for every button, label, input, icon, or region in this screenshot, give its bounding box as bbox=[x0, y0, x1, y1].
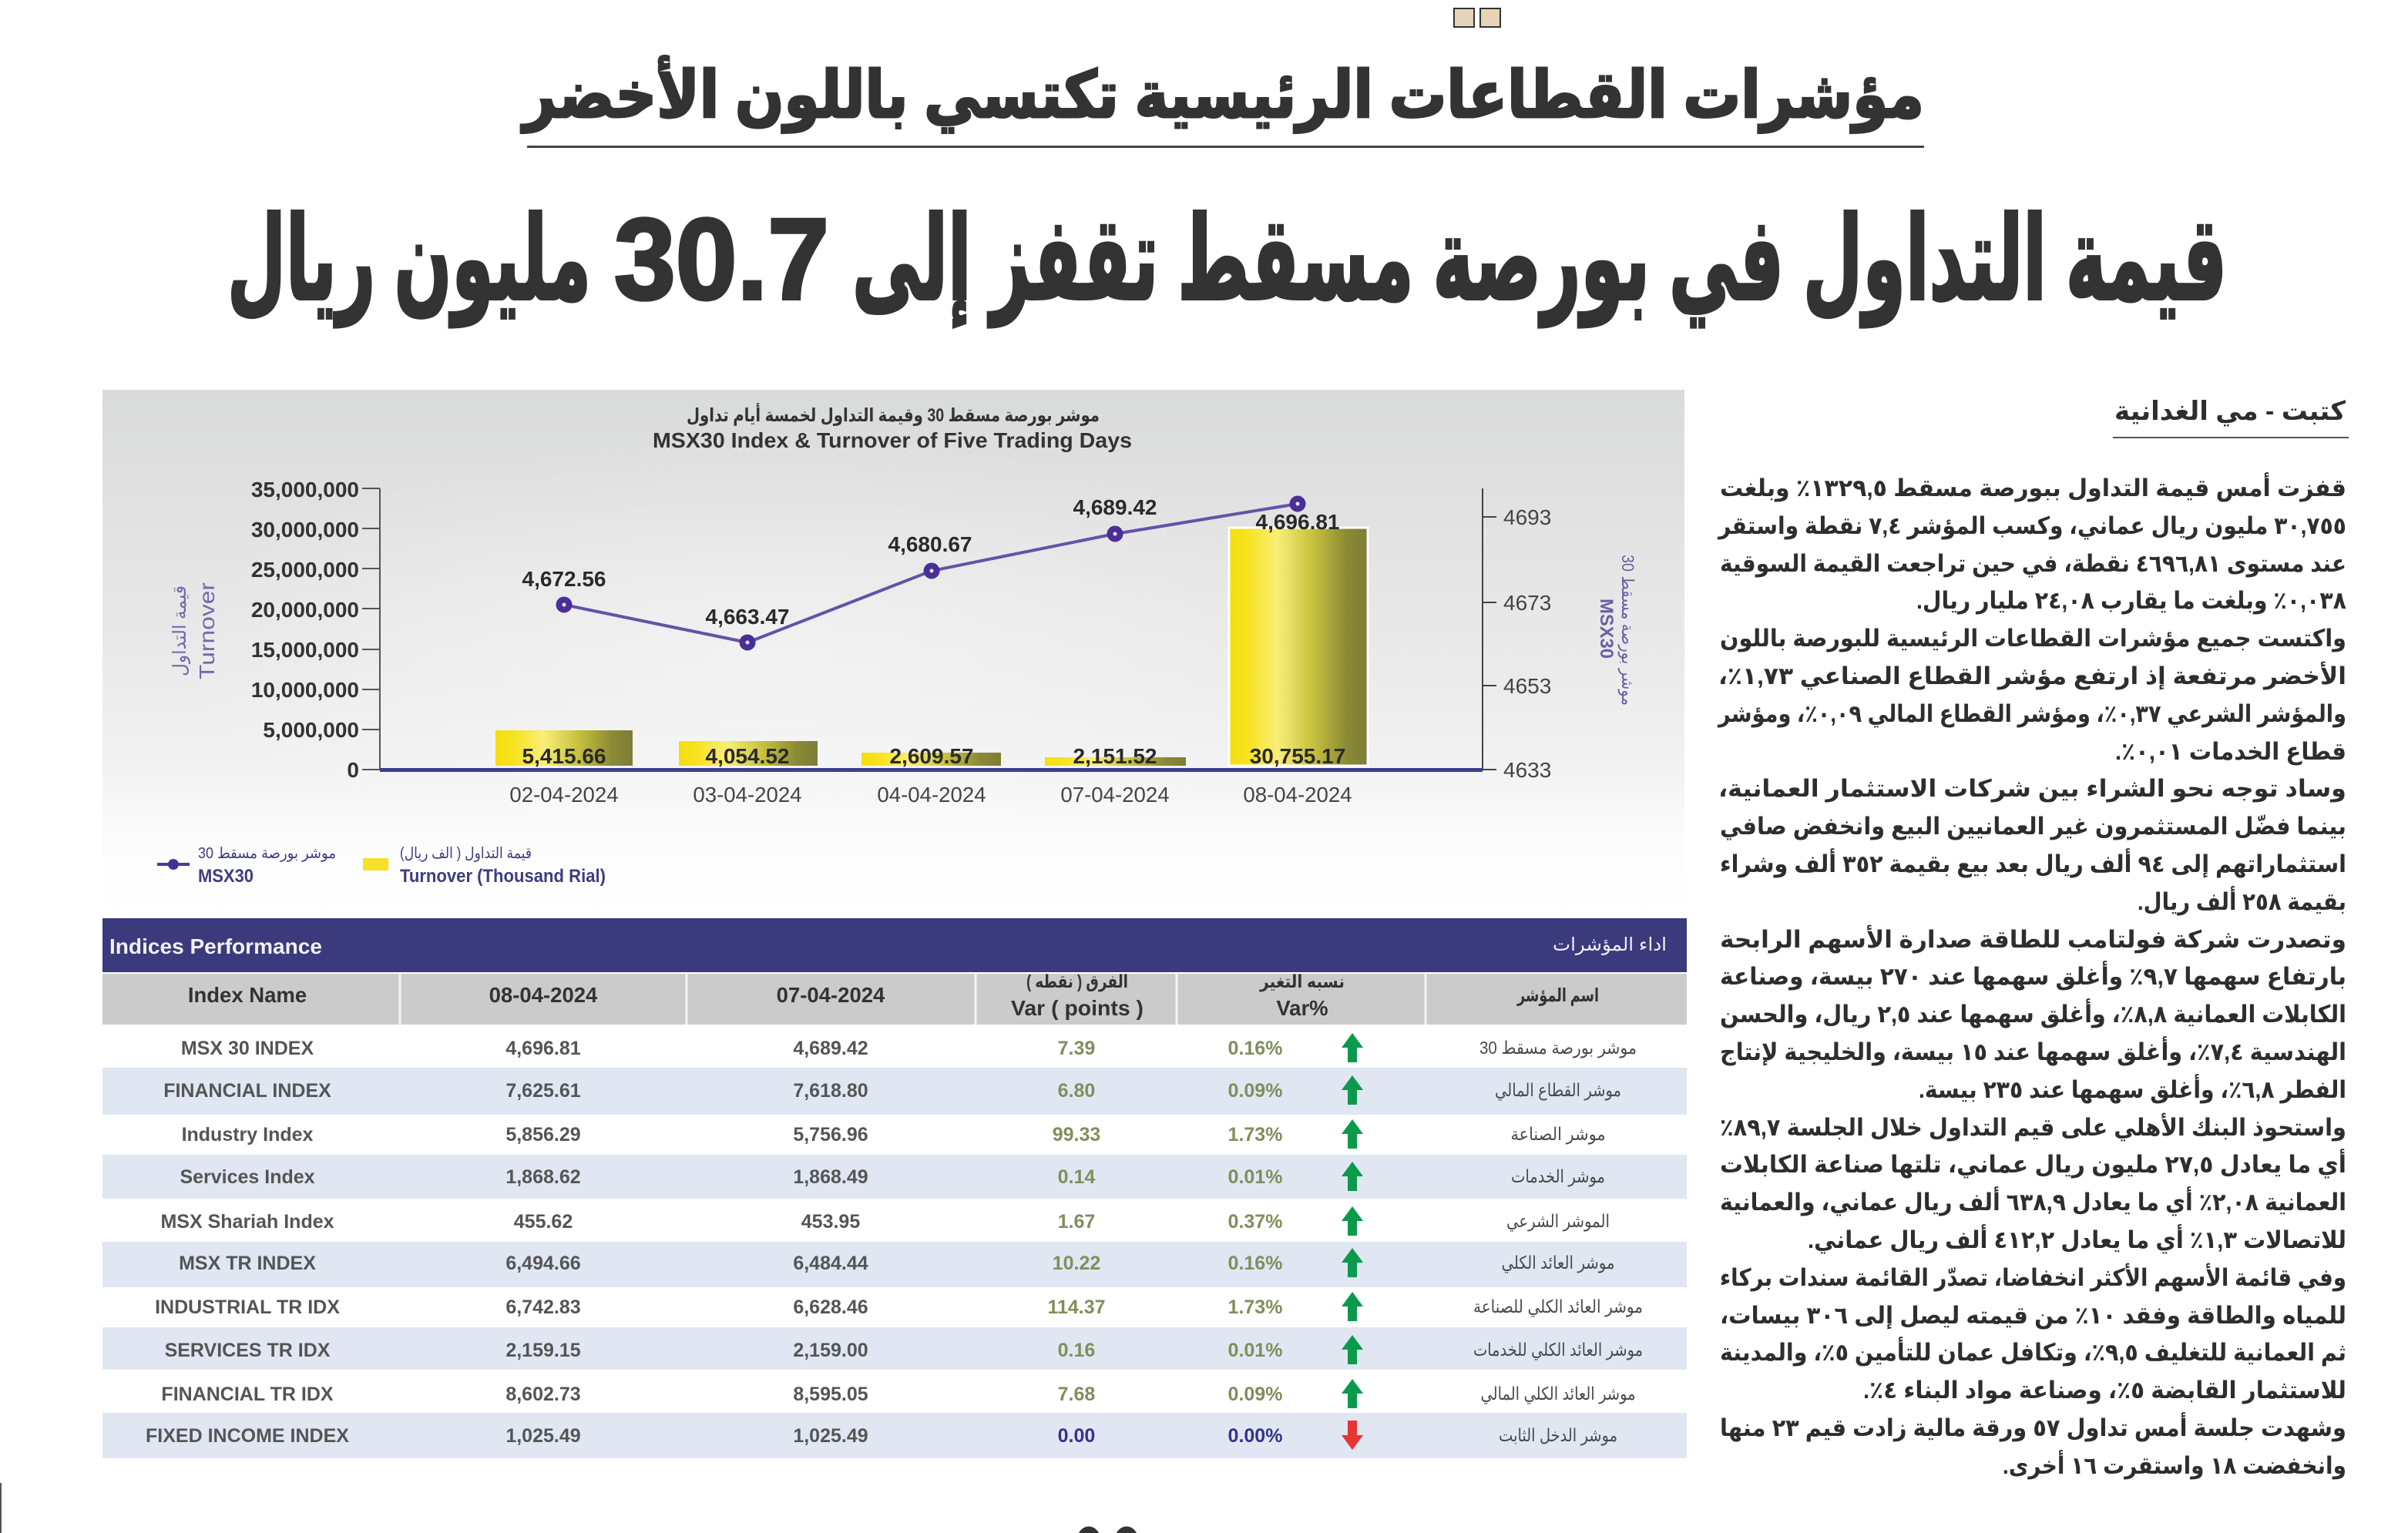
bar value labels: 30,755.17 bbox=[1250, 744, 1345, 768]
row: MSX TR INDEX: 6,494.66 bbox=[505, 1253, 581, 1274]
table column headers: 07-04-2024 bbox=[777, 983, 885, 1007]
left axis: 20,000,000 bbox=[251, 598, 359, 622]
right axis bbox=[1483, 488, 1551, 782]
panel: indices performance table bbox=[102, 918, 1687, 1458]
article body text: ٠,٠٣٨٪ وبلغت ما يقارب ٢٤,٠٨ مليار ريال. bbox=[1916, 587, 2346, 615]
row: FIXED INCOME INDEX bbox=[146, 1421, 1617, 1450]
left axis title: قيمة التداول bbox=[170, 585, 190, 676]
left axis: 0 bbox=[347, 758, 359, 782]
row: INDUSTRIAL TR IDX: INDUSTRIAL TR IDX bbox=[155, 1297, 340, 1318]
right axis title bbox=[1596, 555, 1637, 706]
article body text: استثماراتهم إلى ٩٤ ألف ريال بعد بيع بقيمة ٣٥٢ ألف وشراء bbox=[1720, 848, 2346, 878]
left axis: 30,000,000 bbox=[251, 518, 359, 542]
row: MSX TR INDEX: 10.22 bbox=[1053, 1253, 1100, 1274]
bar value labels: 2,151.52 bbox=[1073, 744, 1157, 768]
article body text: الفطر ٦,٨٪، وأغلق سهمها عند ٢٣٥ بيسة. bbox=[1919, 1074, 2346, 1104]
row: Services Index bbox=[180, 1162, 1605, 1191]
table column headers bbox=[102, 971, 1687, 1025]
right axis title: MSX30 bbox=[1596, 599, 1617, 659]
row: Services Index: Services Index bbox=[180, 1166, 315, 1188]
title bbox=[227, 194, 2227, 327]
table column headers: Var ( points ) bbox=[1011, 996, 1144, 1020]
right axis: 4693 bbox=[1503, 505, 1551, 529]
article body text: الكابلات العمانية ٨,٨٪، وأغلق سهمها عند ٢,٥ ريال، والحسن bbox=[1720, 998, 2346, 1028]
row: FINANCIAL TR IDX: موشر العائد الكلي المالي bbox=[1481, 1384, 1635, 1404]
row: FINANCIAL INDEX: 6.80 bbox=[1058, 1080, 1095, 1102]
article body text: وفي قائمة الأسهم الأكثر انخفاضا، تصدّر القائمة سندات بركاء bbox=[1720, 1263, 2346, 1292]
line value labels: 4,680.67 bbox=[888, 532, 972, 556]
row: SERVICES TR IDX: 2,159.00 bbox=[793, 1340, 868, 1361]
article body text: والمؤشر الشرعي ٠,٣٧٪، ومؤشر القطاع المالي ٠,٠٩٪، ومؤشر bbox=[1717, 700, 2346, 728]
chart title: موشر بورصة مسقط 30 وقيمة التداول لخمسة أيام تداول bbox=[687, 403, 1100, 426]
row: INDUSTRIAL TR IDX bbox=[155, 1292, 1643, 1321]
article body text: أي ما يعادل ٢٧,٥ مليون ريال عماني، تلتها صناعة الكابلات bbox=[1720, 1149, 2346, 1179]
row: Industry Index: موشر الصناعة bbox=[1510, 1124, 1606, 1145]
title: مليون ريال bbox=[227, 194, 591, 327]
row: FIXED INCOME INDEX: 0.00% bbox=[1228, 1425, 1282, 1447]
row: Services Index: 0.01% bbox=[1228, 1166, 1282, 1188]
left axis: 10,000,000 bbox=[251, 678, 359, 702]
left axis bbox=[251, 478, 380, 782]
chart title: MSX30 Index & Turnover of Five Trading Days bbox=[653, 428, 1132, 452]
date labels bbox=[509, 783, 1352, 807]
row: SERVICES TR IDX: 2,159.15 bbox=[505, 1340, 581, 1361]
row: Industry Index: 5,756.96 bbox=[793, 1124, 868, 1146]
article body text: الأخضر مرتفعة إذ ارتفع مؤشر القطاع الصناعي ١,٧٣٪، bbox=[1718, 661, 2346, 690]
row: MSX TR INDEX: 0.16% bbox=[1228, 1253, 1282, 1274]
date labels: 08-04-2024 bbox=[1243, 783, 1352, 807]
legend: MSX30 bbox=[198, 866, 254, 887]
heading: kicker: مؤشرات القطاعات الرئيسية تكتسي باللون الأخضر bbox=[520, 55, 1924, 133]
row: MSX 30 INDEX: 4,689.42 bbox=[793, 1038, 868, 1059]
row: INDUSTRIAL TR IDX: 114.37 bbox=[1047, 1297, 1106, 1318]
table column headers: Var% bbox=[1276, 996, 1328, 1020]
row: MSX Shariah Index: 453.95 bbox=[801, 1211, 860, 1233]
bar value labels: 4,054.52 bbox=[706, 744, 789, 768]
row: FIXED INCOME INDEX: موشر الدخل الثابت bbox=[1499, 1425, 1617, 1446]
table title bar: اداء المؤشرات bbox=[1553, 934, 1667, 955]
icon: section ornament squares bbox=[1454, 8, 1500, 27]
row: MSX Shariah Index bbox=[160, 1206, 1610, 1236]
row: FINANCIAL TR IDX bbox=[161, 1379, 1635, 1408]
row: MSX 30 INDEX: 4,696.81 bbox=[505, 1038, 581, 1059]
right axis: 4653 bbox=[1503, 674, 1551, 698]
row: MSX 30 INDEX: MSX 30 INDEX bbox=[181, 1038, 314, 1059]
bar chart: turnover bbox=[495, 528, 1368, 766]
byline: كتبت - مي الغدانية bbox=[2114, 397, 2346, 427]
table row bands bbox=[102, 1068, 1687, 1458]
table column headers: 08-04-2024 bbox=[489, 983, 598, 1007]
row: MSX Shariah Index: 0.37% bbox=[1228, 1211, 1282, 1233]
row: Services Index: 1,868.62 bbox=[505, 1166, 581, 1188]
row: MSX TR INDEX bbox=[179, 1248, 1615, 1277]
article body text: وساد توجه نحو الشراء بين شركات الاستثمار العمانية، bbox=[1718, 775, 2346, 803]
article body text: عند مستوى ٤٦٩٦,٨١ نقطة، في حين تراجعت القيمة السوقية bbox=[1720, 550, 2346, 578]
zero baseline bbox=[380, 768, 1483, 772]
row: FINANCIAL INDEX: 0.09% bbox=[1228, 1080, 1282, 1102]
row: FINANCIAL TR IDX: FINANCIAL TR IDX bbox=[161, 1384, 334, 1405]
chart title bbox=[653, 403, 1132, 452]
table column headers: اسم المؤشر bbox=[1516, 985, 1599, 1006]
panel: chart bbox=[102, 390, 1684, 917]
row: FIXED INCOME INDEX: FIXED INCOME INDEX bbox=[146, 1425, 349, 1447]
row: FINANCIAL TR IDX: 8,595.05 bbox=[793, 1384, 868, 1405]
row: FINANCIAL INDEX: FINANCIAL INDEX bbox=[163, 1080, 331, 1102]
article body text: بينما فضّل المستثمرون غير العمانيين البيع وانخفض صافي bbox=[1720, 813, 2346, 840]
table title bar: Indices Performance bbox=[109, 934, 322, 958]
row: FINANCIAL TR IDX: 7.68 bbox=[1058, 1384, 1095, 1405]
row: MSX TR INDEX: 6,484.44 bbox=[793, 1253, 868, 1274]
row: SERVICES TR IDX: SERVICES TR IDX bbox=[165, 1340, 331, 1361]
row: Services Index: 0.14 bbox=[1058, 1166, 1095, 1188]
article body text: بقيمة ٢٥٨ ألف ريال. bbox=[2138, 886, 2346, 916]
line value labels bbox=[522, 495, 1339, 629]
article body text: للاتصالات ١,٣٪ أي ما يعادل ٤١٢,٢ ألف ريال عماني. bbox=[1808, 1224, 2346, 1254]
article body text: للاستثمار القابضة ٥٪، وصناعة مواد البناء ٤٪. bbox=[1863, 1377, 2346, 1404]
left axis: 25,000,000 bbox=[251, 558, 359, 582]
article body text: وانخفضت ١٨ واستقرت ١٦ أخرى. bbox=[2003, 1450, 2346, 1480]
line chart: MSX30 bbox=[559, 499, 1302, 647]
page edge line bbox=[0, 1483, 2, 1533]
row: Industry Index bbox=[182, 1119, 1606, 1149]
line value labels: 4,663.47 bbox=[706, 605, 789, 629]
article body text: بارتفاع سهمها ٩,٧٪ وأغلق سهمها عند ٢٧٠ بيسة، وصناعة bbox=[1720, 961, 2346, 991]
left axis: 35,000,000 bbox=[251, 478, 359, 501]
right axis: 4633 bbox=[1503, 758, 1551, 782]
date labels: 07-04-2024 bbox=[1060, 783, 1170, 807]
article body text: وتصدرت شركة فولتامب للطاقة صدارة الأسهم الرابحة bbox=[1720, 924, 2346, 954]
line value labels: 4,689.42 bbox=[1073, 495, 1157, 519]
article body text bbox=[1717, 472, 2346, 1480]
article body text: الهندسية ٧,٤٪، وأغلق سهمها عند ١٥ بيسة، والخليجية لإنتاج bbox=[1720, 1036, 2346, 1066]
row: INDUSTRIAL TR IDX: 6,742.83 bbox=[505, 1297, 581, 1318]
legend bbox=[157, 845, 606, 887]
left axis title bbox=[170, 582, 219, 679]
row: FINANCIAL TR IDX: 0.09% bbox=[1228, 1384, 1282, 1405]
row: FIXED INCOME INDEX: 1,025.49 bbox=[793, 1425, 868, 1447]
row: FINANCIAL INDEX: موشر القطاع المالي bbox=[1495, 1080, 1621, 1101]
left axis: 15,000,000 bbox=[251, 638, 359, 662]
article body text: وشهدت جلسة أمس تداول ٥٧ ورقة مالية زادت قيم ٢٣ منها bbox=[1720, 1412, 2346, 1442]
line value labels: 4,672.56 bbox=[522, 567, 606, 591]
right axis: 4673 bbox=[1503, 591, 1551, 615]
row: SERVICES TR IDX: 0.16 bbox=[1058, 1340, 1095, 1361]
article body text: واكتست جميع مؤشرات القطاعات الرئيسية للبورصة باللون bbox=[1720, 625, 2346, 652]
article body text: العمانية ٢,٠٨٪ أي ما يعادل ٦٣٨,٩ ألف ريال عماني، والعمانية bbox=[1720, 1186, 2346, 1216]
article body text: واستحوذ البنك الأهلي على قيم التداول خلال الجلسة ٨٩,٧٪ bbox=[1720, 1112, 2346, 1142]
row: Services Index: 1,868.49 bbox=[793, 1166, 868, 1188]
table column headers: نسبه التغير bbox=[1259, 971, 1345, 992]
left axis title: Turnover bbox=[195, 582, 219, 679]
clipped next headline digits at page bottom bbox=[1080, 1531, 1136, 1533]
row: SERVICES TR IDX: 0.01% bbox=[1228, 1340, 1282, 1361]
bar value labels: 5,415.66 bbox=[522, 744, 606, 768]
bar value labels bbox=[522, 744, 1345, 768]
table column headers: Index Name bbox=[188, 983, 307, 1007]
row: MSX 30 INDEX: موشر بورصة مسقط 30 bbox=[1479, 1038, 1637, 1058]
row: INDUSTRIAL TR IDX: 1.73% bbox=[1228, 1297, 1282, 1318]
legend: قيمة التداول ( الف ريال) bbox=[400, 845, 532, 862]
bar value labels: 2,609.57 bbox=[889, 744, 974, 768]
row: SERVICES TR IDX: موشر العائد الكلي للخدمات bbox=[1473, 1340, 1643, 1360]
row: MSX TR INDEX: MSX TR INDEX bbox=[179, 1253, 316, 1274]
row: Industry Index: 1.73% bbox=[1228, 1124, 1282, 1146]
row: MSX Shariah Index: الموشر الشرعي bbox=[1506, 1211, 1610, 1232]
row: INDUSTRIAL TR IDX: 6,628.46 bbox=[793, 1297, 868, 1318]
row: FIXED INCOME INDEX: 0.00 bbox=[1058, 1425, 1095, 1447]
left axis: 5,000,000 bbox=[263, 718, 359, 742]
title: 30.7 bbox=[614, 194, 829, 324]
article body text: ٣٠,٧٥٥ مليون ريال عماني، وكسب المؤشر ٧,٤ نقطة واستقر bbox=[1717, 512, 2346, 540]
table title bar bbox=[102, 918, 1687, 972]
article body text: قطاع الخدمات ٠,٠١٪. bbox=[2115, 738, 2346, 766]
article body text: للمياه والطاقة وفقد ١٠٪ من قيمته ليصل إلى ٣٠٦ بيسات، bbox=[1720, 1302, 2346, 1330]
date labels: 03-04-2024 bbox=[693, 783, 802, 807]
kicker underline bbox=[527, 146, 1924, 148]
row: Industry Index: 5,856.29 bbox=[505, 1124, 581, 1146]
row: FINANCIAL TR IDX: 8,602.73 bbox=[505, 1384, 581, 1405]
legend: موشر بورصة مسقط 30 bbox=[198, 845, 336, 862]
right axis title: موشر بورصة مسقط 30 bbox=[1618, 555, 1637, 706]
row: SERVICES TR IDX bbox=[165, 1335, 1643, 1364]
row: FINANCIAL INDEX: 7,625.61 bbox=[505, 1080, 581, 1102]
row: MSX Shariah Index: 455.62 bbox=[514, 1211, 573, 1233]
row: FIXED INCOME INDEX: 1,025.49 bbox=[505, 1425, 581, 1447]
row: MSX TR INDEX: موشر العائد الكلي bbox=[1501, 1253, 1615, 1273]
row: Industry Index: 99.33 bbox=[1053, 1124, 1100, 1146]
article body text: ثم العمانية للتغليف ٩,٥٪، وتكافل عمان للتأمين ٥٪، والمدينة bbox=[1720, 1337, 2346, 1367]
row: MSX 30 INDEX: 7.39 bbox=[1058, 1038, 1095, 1059]
row: Services Index: موشر الخدمات bbox=[1511, 1166, 1605, 1187]
table column headers: الفرق ( نقطه ) bbox=[1026, 971, 1128, 992]
row: MSX 30 INDEX: 0.16% bbox=[1228, 1038, 1282, 1059]
article body text: قفزت أمس قيمة التداول ببورصة مسقط ١٣٢٩,٥٪ وبلغت bbox=[1720, 472, 2346, 502]
row: MSX 30 INDEX bbox=[181, 1033, 1637, 1062]
date labels: 02-04-2024 bbox=[509, 783, 619, 807]
row: MSX Shariah Index: MSX Shariah Index bbox=[160, 1211, 334, 1233]
row: INDUSTRIAL TR IDX: موشر العائد الكلي للصناعة bbox=[1473, 1297, 1643, 1317]
row: FINANCIAL INDEX bbox=[163, 1075, 1621, 1105]
row: Industry Index: Industry Index bbox=[182, 1124, 314, 1146]
line value labels: 4,696.81 bbox=[1256, 510, 1339, 534]
row: FINANCIAL INDEX: 7,618.80 bbox=[793, 1080, 868, 1102]
legend: Turnover (Thousand Rial) bbox=[400, 866, 606, 887]
date labels: 04-04-2024 bbox=[877, 783, 986, 807]
row: MSX Shariah Index: 1.67 bbox=[1058, 1211, 1095, 1233]
